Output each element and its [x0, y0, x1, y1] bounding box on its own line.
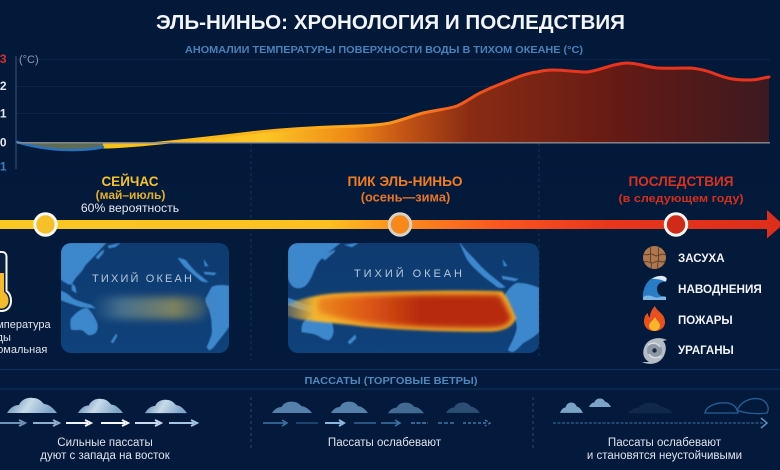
- stage heading: consequences: [618, 174, 744, 205]
- warm anomaly area: [103, 63, 769, 147]
- wind arrowhead: [761, 418, 767, 428]
- wind line: [553, 422, 764, 424]
- timeline node: now: [35, 214, 56, 235]
- trade winds: unstable: [553, 398, 768, 462]
- label: drought: ЗАСУХА: [678, 253, 725, 265]
- y axis: (°C): [19, 54, 39, 66]
- trade winds: strong: [0, 398, 197, 462]
- anomaly line: warm: [103, 63, 769, 147]
- title: ЭЛЬ-НИНЬО: ХРОНОЛОГИЯ И ПОСЛЕДСТВИЯ: [156, 12, 625, 34]
- icon: flood wave: [643, 276, 667, 300]
- stage heading: peak: ПИК ЭЛЬ-НИНЬО: [348, 174, 462, 189]
- label: floods: НАВОДНЕНИЯ: [678, 283, 762, 296]
- cool dip below zero: [17, 142, 103, 150]
- y axis: [0, 52, 39, 174]
- clouds: [272, 402, 480, 413]
- stage heading: now: (май–июль): [96, 188, 165, 202]
- ocean label: ТИХИЙ ОКЕАН: [92, 272, 192, 285]
- y axis: 3: [0, 52, 7, 66]
- map: current: [61, 243, 229, 353]
- caption: Сильные пассаты: [57, 437, 153, 449]
- heat band core: [318, 294, 512, 328]
- caption: Пассаты ослабевают: [328, 437, 442, 449]
- label: fires: ПОЖАРЫ: [678, 315, 733, 327]
- stage heading: now: [81, 174, 179, 215]
- icon: fire: [644, 306, 665, 331]
- y axis: 0: [0, 136, 7, 150]
- icon: hurricane: [642, 338, 667, 364]
- land: [61, 243, 229, 350]
- map: peak: [286, 243, 539, 353]
- wind arrows: [263, 420, 490, 426]
- warm band: [92, 297, 208, 319]
- anomaly line: cool: [17, 142, 103, 150]
- ocean label: ТИХИЙ ОКЕАН: [354, 267, 462, 280]
- consequences list: [642, 246, 762, 364]
- timeline node: peak: [389, 214, 411, 235]
- trade winds: weakening: [263, 402, 490, 449]
- stage heading: peak: [348, 174, 462, 204]
- stage heading: now: 60% вероятность: [81, 201, 179, 215]
- trade winds heading: ПАССАТЫ (ТОРГОВЫЕ ВЕТРЫ): [304, 375, 478, 387]
- area chart: temperature anomalies: [0, 52, 770, 174]
- timeline arrow: [0, 210, 780, 238]
- clouds: [7, 398, 187, 413]
- label: hurricanes: УРАГАНЫ: [678, 345, 734, 357]
- caption: и становятся неустойчивыми: [587, 450, 742, 462]
- y axis: 2: [0, 79, 7, 93]
- heat band glow: [286, 291, 516, 332]
- wind arrows: [0, 420, 197, 426]
- stage heading: consequences: ПОСЛЕДСТВИЯ: [628, 174, 734, 189]
- y axis: 1: [0, 106, 7, 120]
- caption: Пассаты ослабевают: [608, 437, 722, 449]
- icon: drought: [643, 246, 666, 269]
- stage heading: peak: (осень—зима): [361, 190, 450, 204]
- stage heading: now: СЕЙЧАС: [101, 174, 159, 189]
- stage heading: consequences: (в следующем году): [618, 193, 744, 205]
- caption: [40, 437, 171, 462]
- faded cloud outlines: [705, 399, 768, 414]
- caption: дуют с запада на восток: [40, 450, 171, 462]
- caption: [587, 437, 742, 462]
- thermometer caption: [0, 319, 52, 356]
- land: [288, 243, 539, 352]
- chart subtitle: АНОМАЛИИ ТЕМПЕРАТУРЫ ПОВЕРХНОСТИ ВОДЫ В ТИХОМ ОКЕАНЕ (°C): [185, 44, 583, 56]
- y axis: 1: [0, 160, 7, 174]
- clouds: [560, 398, 673, 413]
- icon: thermometer: [0, 252, 11, 311]
- timeline node: consequences: [665, 214, 687, 235]
